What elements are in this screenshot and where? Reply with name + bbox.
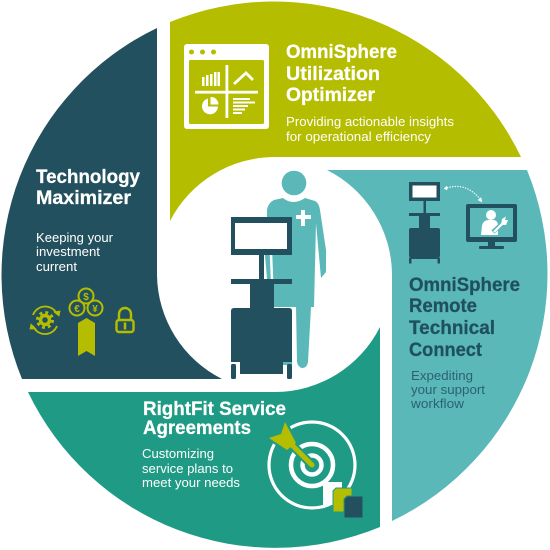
icon: remote technician on monitor	[466, 204, 517, 249]
panel: OmniSphere Utilization Optimizer	[170, 2, 521, 221]
text: Keeping your investment current: Keeping your	[36, 230, 114, 245]
panel: Technology Maximizer	[2, 28, 222, 379]
heading: RightFit Service Agreements: RightFit Service	[143, 399, 286, 420]
icon: gear with circular arrows	[30, 306, 60, 334]
heading: Technology Maximizer: Maximizer	[36, 188, 132, 209]
icon: coins and ribbon: ¥	[92, 304, 98, 315]
text: Expediting your support workflow: workflow	[410, 396, 465, 411]
heading: OmniSphere Remote Technical Connect	[409, 275, 520, 361]
heading: Technology Maximizer	[36, 167, 140, 209]
text: Keeping your investment current: current	[36, 259, 77, 274]
text: Providing actionable insights: for operational efficiency	[286, 129, 432, 144]
icon: coins and ribbon	[70, 288, 102, 356]
heading: OmniSphere Utilization Optimizer: Optimizer	[286, 85, 376, 106]
text: Providing actionable insights: Providing actionable insights	[286, 114, 454, 129]
icon: target with arrow	[269, 422, 355, 508]
icon: nurse figure	[265, 171, 326, 368]
heading: OmniSphere Remote Technical Connect: Connect	[409, 340, 483, 361]
text: Customizing service plans: service plans to	[142, 461, 233, 476]
text: Customizing service plans	[142, 446, 240, 490]
text: Expediting your support workflow	[410, 368, 485, 411]
heading: OmniSphere Remote Technical Connect: Remote	[409, 296, 477, 317]
heading: OmniSphere Utilization Optimizer	[286, 42, 397, 106]
icon: small ultrasound cart	[409, 182, 440, 264]
icon: coins and ribbon: $	[83, 292, 89, 303]
text: Keeping your investment current: investment	[36, 244, 100, 259]
text: Customizing service plans: Customizing	[142, 446, 214, 461]
icon: analytics dashboard window	[184, 44, 269, 129]
icon: stacked documents	[323, 482, 363, 518]
illustration: nurse beside ultrasound cart	[231, 171, 326, 379]
heading: OmniSphere Remote Technical Connect: Technical	[409, 318, 495, 339]
arrow: dotted two-way connection	[444, 186, 482, 202]
icon: ultrasound cart	[231, 217, 292, 379]
heading: OmniSphere Utilization Optimizer: OmniSphere	[286, 42, 397, 63]
heading: Technology Maximizer: Technology	[36, 167, 140, 188]
heading: RightFit Service Agreements: Agreements	[143, 418, 251, 439]
panel: OmniSphere Remote Technical Connect	[327, 170, 547, 521]
text: Expediting your support workflow: Expediting	[411, 368, 473, 383]
text: Providing actionable insights	[286, 114, 454, 144]
icon: coins and ribbon: €	[74, 304, 80, 315]
panel: RightFit Service Agreements	[28, 327, 380, 548]
icon: padlock	[116, 308, 134, 332]
heading: RightFit Service Agreements	[143, 399, 286, 439]
text: Customizing service plans: meet your needs	[142, 475, 240, 490]
text: Expediting your support workflow: your support	[411, 382, 485, 397]
heading: OmniSphere Remote Technical Connect: OmniSphere	[409, 275, 520, 296]
text: Keeping your investment current	[36, 230, 114, 274]
heading: OmniSphere Utilization Optimizer: Utilization	[286, 64, 380, 85]
